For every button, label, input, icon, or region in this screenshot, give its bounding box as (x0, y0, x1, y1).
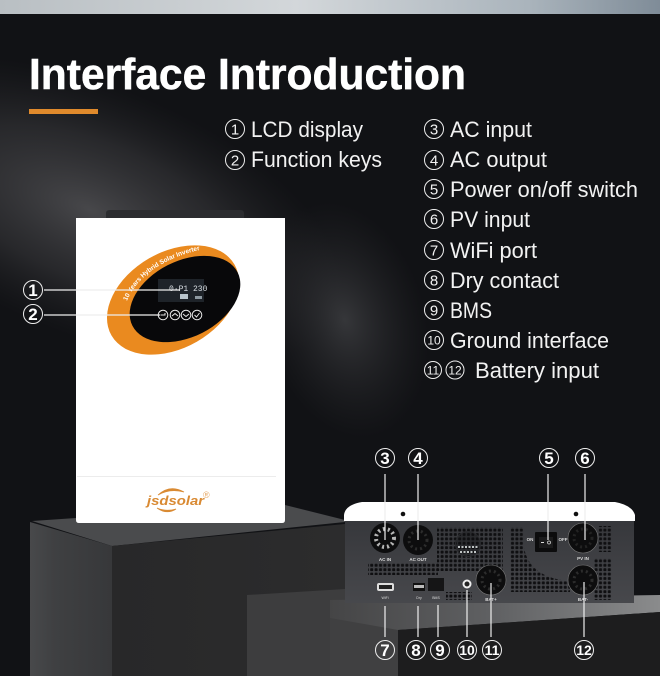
callout markers: 5 (544, 449, 554, 468)
legend: front panel items: Function keys (251, 147, 382, 172)
legend: rear panel items (424, 117, 638, 383)
legend: front panel items: LCD display (251, 117, 363, 142)
legend: rear panel items: 8 (430, 272, 438, 290)
WiFi port (377, 583, 394, 600)
callout markers: 10 (459, 642, 475, 658)
ground terminal (464, 580, 470, 588)
AC OUT port (403, 525, 433, 562)
top photo strip (0, 0, 660, 14)
legend: rear panel items: AC output (450, 147, 547, 172)
left podium (30, 505, 345, 676)
power switch: OFF (558, 537, 568, 542)
black display oval (115, 238, 255, 360)
function keys (158, 310, 202, 320)
brand logo: jsdsolar (145, 493, 205, 508)
legend: rear panel items: 10 (427, 334, 441, 348)
callout markers: 1 (28, 281, 38, 300)
title accent bar (29, 109, 98, 114)
rear body (345, 519, 634, 603)
legend: rear panel items: 12 (448, 364, 462, 378)
BMS port: BMS (432, 596, 440, 600)
dry contact port (413, 583, 425, 600)
legend: rear panel items: BMS (450, 298, 492, 323)
BAT port (568, 565, 598, 602)
inverter case (76, 218, 285, 523)
legend: rear panel items: Battery input (475, 358, 599, 383)
PV IN port (568, 523, 598, 561)
AC IN port: AC IN (379, 557, 391, 562)
orange oval (88, 223, 258, 377)
vent grids (368, 526, 612, 600)
callout markers: 7 (380, 641, 390, 660)
front inverter (76, 210, 285, 523)
callout markers: 9 (435, 641, 445, 660)
callout markers: 3 (380, 449, 390, 468)
PV IN port: PV IN (577, 556, 589, 561)
legend: rear panel items: Ground interface (450, 328, 609, 353)
BMS port (428, 578, 444, 600)
legend: rear panel items: 3 (430, 122, 438, 138)
legend: rear panel items: PV input (450, 207, 530, 232)
callout markers: 11 (485, 642, 500, 658)
legend: rear panel items: WiFi port (450, 238, 537, 263)
legend: rear panel items: Power on/off switch (450, 177, 638, 202)
rear white cover (344, 502, 635, 521)
legend: rear panel items: 7 (430, 242, 438, 260)
power switch (527, 532, 568, 552)
groove line (77, 476, 276, 477)
fan (455, 531, 481, 557)
dry contact port: Dry (416, 596, 422, 600)
legend: rear panel items: 6 (430, 212, 438, 228)
callout markers: 2 (28, 305, 38, 324)
callout markers: 4 (413, 449, 423, 468)
brand logo (145, 489, 210, 512)
callout markers: 6 (580, 449, 590, 468)
legend: front panel items: 2 (231, 152, 239, 170)
legend: rear panel items: Dry contact (450, 268, 559, 293)
title: Interface Introduction (29, 50, 466, 99)
legend: rear panel items: 9 (430, 302, 438, 320)
WiFi port: WiFi (382, 596, 389, 600)
AC IN port (370, 523, 400, 562)
legend: rear panel items: 11 (427, 364, 440, 378)
power switch: ON (527, 537, 533, 542)
legend: rear panel items: AC input (450, 117, 532, 142)
mounting bracket (106, 210, 244, 218)
callout markers: 12 (576, 642, 592, 658)
legend: front panel items (226, 117, 382, 172)
brand logo: ® (203, 490, 210, 500)
curved product text: 10 Years Hybrid Solar Inverter (123, 246, 200, 301)
screw holes (401, 512, 578, 516)
LCD screen: 0·P1 230 (169, 285, 208, 294)
legend: front panel items: 1 (231, 122, 239, 138)
callout markers (24, 280, 594, 660)
callout markers: 8 (411, 641, 421, 660)
right platform (330, 595, 660, 676)
BAT+ port: BAT+ (485, 597, 497, 602)
rear inverter view (344, 502, 635, 603)
legend: rear panel items: 5 (430, 182, 438, 198)
LCD screen (158, 279, 208, 302)
BAT port: BAT- (578, 597, 589, 602)
legend: rear panel items: 4 (430, 152, 438, 170)
AC OUT port: AC OUT (409, 557, 427, 562)
callout lines (44, 290, 585, 637)
BAT+ port (476, 565, 506, 602)
